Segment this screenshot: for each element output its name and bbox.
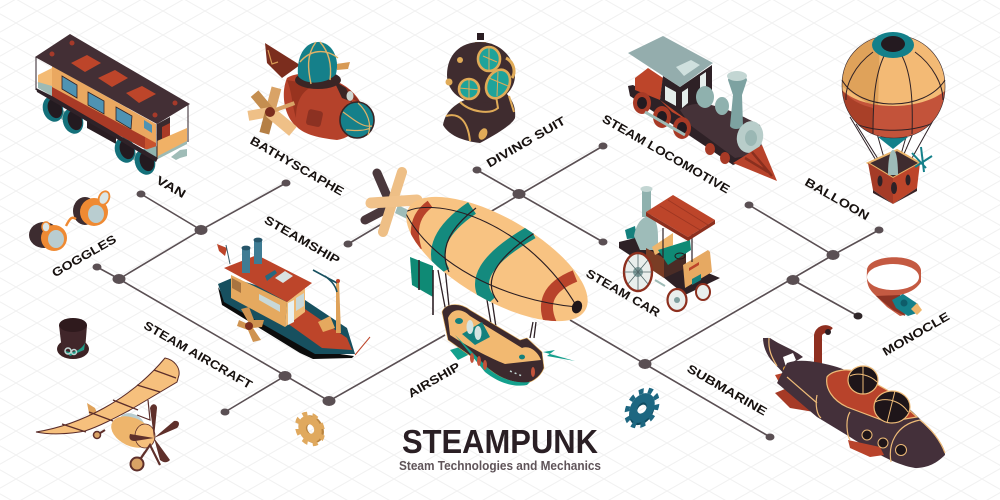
- label: bathyscaphe: BATHYSCAPHE: [248, 133, 346, 199]
- icon: steam aircraft: [36, 358, 179, 470]
- flowchart connectors: [92, 142, 884, 440]
- subtitle: Steam Technologies and Mechanics: [399, 459, 601, 473]
- label: balloon: BALLOON: [802, 175, 872, 223]
- label: van: VAN: [154, 173, 188, 201]
- label: steamship: STEAMSHIP: [262, 213, 342, 267]
- title: STEAMPUNK: [402, 423, 598, 460]
- icon: gold gear: [292, 410, 328, 448]
- label: monocle: MONOCLE: [880, 309, 952, 359]
- label: airship: AIRSHIP: [405, 359, 463, 401]
- label: goggles: GOGGLES: [49, 232, 119, 280]
- label: diving suit: DIVING SUIT: [484, 113, 569, 170]
- icon: airship: [365, 172, 606, 386]
- label: steam locomotive: STEAM LOCOMOTIVE: [600, 112, 732, 196]
- icon: steam car: [619, 186, 720, 311]
- icon: blue gear: [621, 385, 663, 431]
- icon: goggles: [29, 190, 111, 251]
- icon: steam locomotive: [628, 36, 777, 181]
- icon: monocle: [867, 257, 922, 316]
- label: steam car: STEAM CAR: [584, 266, 663, 320]
- icon: bathyscaphe: [247, 42, 374, 140]
- icon: submarine: [763, 329, 945, 468]
- icon: balloon: [840, 32, 948, 204]
- icon: diving suit: [443, 33, 515, 143]
- icon: top hat: [57, 318, 89, 359]
- label: submarine: SUBMARINE: [685, 361, 769, 419]
- icon: van: [35, 34, 190, 177]
- icon: steamship: [217, 238, 370, 359]
- label: steam aircraft: STEAM AIRCRAFT: [141, 318, 255, 392]
